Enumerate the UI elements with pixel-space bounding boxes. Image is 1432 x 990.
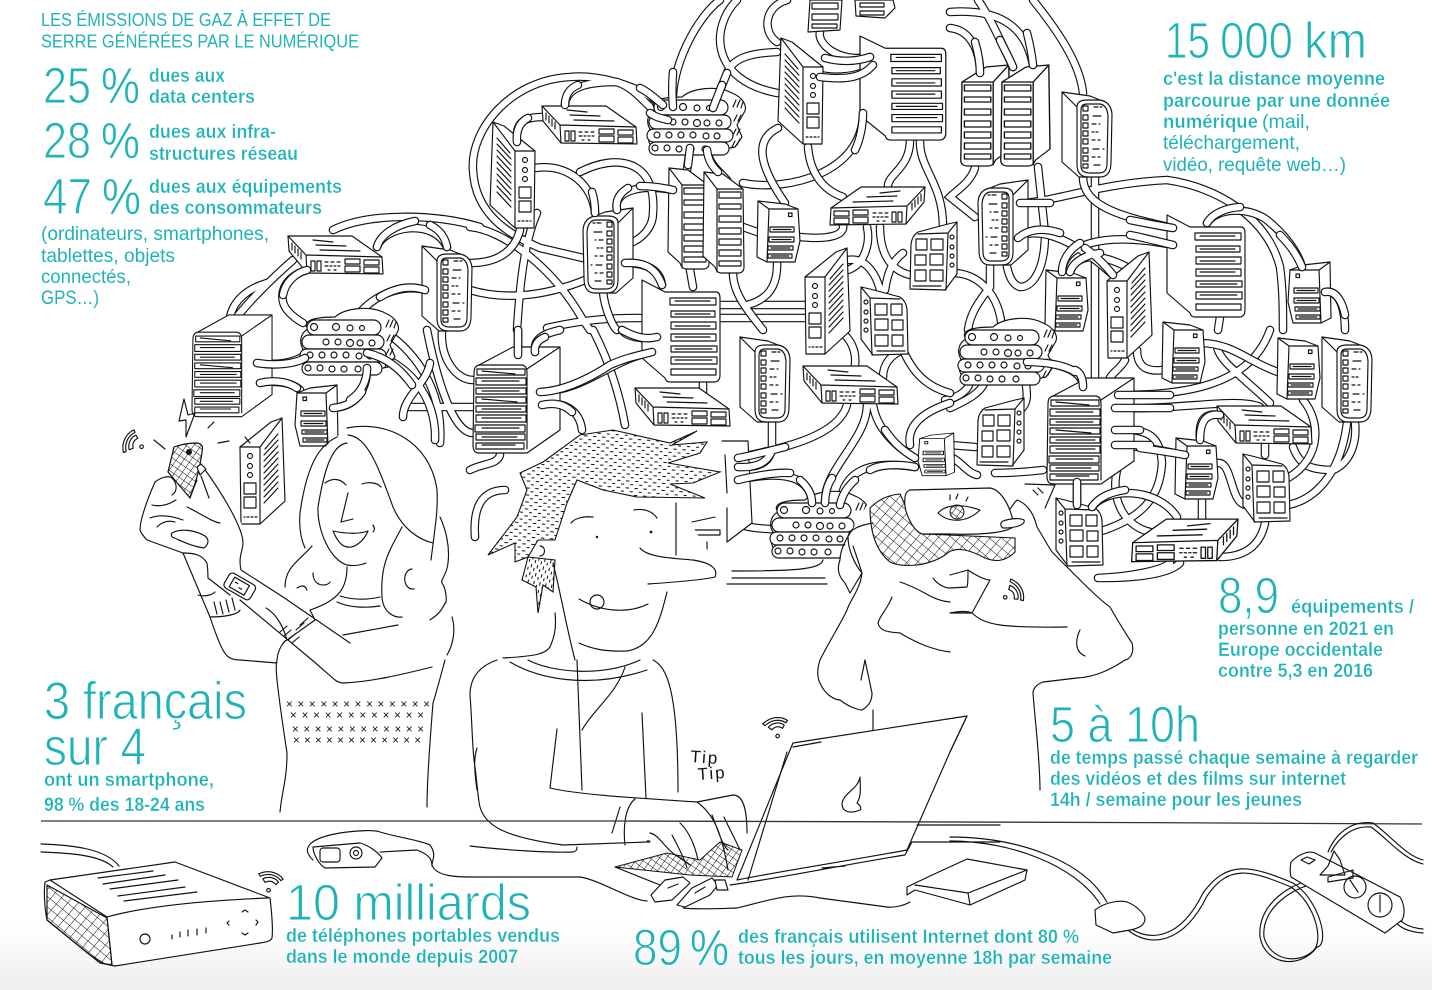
consumer devices note: [41, 223, 269, 309]
heading: SERRE GÉNÉRÉES PAR LE NUMÉRIQUE: [41, 32, 359, 52]
stat 28 %: structures réseau: [149, 143, 298, 165]
stat 47 %: 47: [43, 168, 92, 225]
icon: hard disk box: [907, 859, 1027, 905]
man hair: [488, 430, 720, 562]
man face and body lines: [470, 503, 747, 870]
stat 47 %: [43, 168, 342, 225]
stat 25 %: dues aux: [149, 65, 225, 87]
headline number: km: [1304, 12, 1367, 69]
thumb lines: [190, 476, 209, 498]
icon: smartphone: [168, 443, 202, 498]
tip tip sound text: Tip: [690, 747, 720, 768]
description: parcourue par une donnée: [1163, 90, 1390, 112]
headline number: 15: [1165, 12, 1210, 69]
disk stacks: [300, 88, 1056, 558]
panel boxes: [422, 92, 1372, 422]
headline number: 8,9: [1218, 567, 1279, 624]
laptop: [737, 716, 967, 880]
sparks: [154, 422, 250, 449]
cuff stripes: [214, 598, 308, 643]
top cropped box: [855, 0, 895, 18]
man sideburn: [522, 557, 555, 613]
icon: wifi near phone: [119, 428, 148, 459]
heading: LES ÉMISSIONS DE GAZ À EFFET DE: [41, 10, 331, 30]
server behind the man's head: [691, 441, 752, 542]
headline number: [633, 919, 729, 976]
description: [1050, 747, 1418, 811]
stat 47 %: dues aux équipements: [149, 176, 342, 198]
background fade: [0, 925, 1432, 990]
headline number: 000: [1220, 12, 1293, 69]
icon: thumb nail on phone: [197, 464, 206, 475]
camera dot: [186, 449, 192, 455]
woman line art: [140, 426, 454, 812]
stat 28 %: dues aux infra-: [149, 121, 276, 143]
description: contre 5,3 en 2016: [1218, 660, 1373, 682]
laptop group: [615, 716, 967, 885]
description: vidéo, requête web…): [1163, 154, 1346, 176]
woman with smartphone: [119, 399, 455, 812]
description: Europe occidentale: [1218, 639, 1383, 661]
sweater x pattern: × × × × × × × × × × × × ×: [286, 699, 430, 711]
stat block: 89 %: [633, 919, 1112, 976]
sweater x row: × × × × × × × × × × × ×: [290, 710, 424, 722]
VR eye: [938, 494, 980, 520]
description: c'est la distance moyenne: [1163, 68, 1385, 90]
headline number: 5 à 10h: [1050, 696, 1200, 753]
description: numérique: [1163, 111, 1258, 133]
tip tip sound text: Tip: [697, 763, 727, 784]
woman hair and body knockout: [140, 426, 455, 812]
laptop keyboard: [615, 842, 742, 877]
description: des vidéos et des films sur internet: [1050, 768, 1346, 790]
network cloud illustration: [192, 0, 1372, 584]
icon: small phone on desk: [313, 843, 382, 868]
stat 47 %: %: [102, 168, 141, 225]
VR person knockout: [820, 495, 1125, 790]
stat 25 %: 25: [43, 57, 91, 114]
headline number: [44, 672, 247, 777]
consumer devices note: connectés,: [41, 266, 131, 288]
desk line: [41, 821, 1422, 824]
description: [1163, 68, 1390, 176]
headline number: [1165, 12, 1367, 69]
description: ont un smartphone,: [44, 769, 214, 791]
top cropped rack: [808, 0, 842, 32]
stat block: 3 français sur 4: [44, 672, 247, 816]
description: [286, 925, 560, 968]
stat block: 8,9 devices: [1218, 567, 1415, 682]
headline number: %: [690, 919, 729, 976]
consumer devices note: (ordinateurs, smartphones,: [41, 223, 269, 245]
stat 47 %: des consommateurs: [149, 197, 322, 219]
VR strap hatch: [870, 494, 1015, 565]
icon: lightning bolt: [179, 399, 195, 437]
stat block: 15 000 km: [1163, 12, 1390, 176]
heading: [41, 10, 359, 52]
VR right hand fingers: [1001, 519, 1024, 528]
switches: [288, 106, 1312, 562]
description: des français utilisent Internet dont 80 %: [738, 926, 1079, 948]
server outline: [691, 441, 752, 553]
description: dans le monde depuis 2007: [286, 946, 518, 968]
man with laptop: [470, 430, 747, 877]
desk objects: [41, 823, 1423, 966]
description: tous les jours, en moyenne 18h par semaine: [738, 947, 1112, 969]
VR headset: [905, 488, 1013, 534]
icon: power adapter: [1095, 901, 1145, 933]
stat block: 5 à 10h: [1050, 696, 1418, 811]
big servers: [192, 36, 1245, 484]
stat 28 %: [43, 112, 298, 169]
stat 28 %: 28: [43, 112, 91, 169]
VR person lines: [818, 500, 1133, 790]
description: [738, 926, 1112, 969]
icon: internet box: [44, 862, 272, 966]
stat block: 10 milliards: [286, 874, 560, 968]
man eyes: [596, 531, 652, 538]
laptop base and logo: [615, 716, 967, 885]
cables: [227, 0, 1355, 578]
headline number: 89: [633, 919, 682, 976]
description: équipements /: [1291, 596, 1415, 618]
cable plugs over devices: [257, 33, 1345, 507]
hard disk edge: [915, 870, 1027, 905]
consumer devices note: GPS…): [41, 287, 99, 309]
icon: wifi near box: [255, 869, 284, 895]
headline number: 3 français: [44, 672, 247, 731]
icon: power strip: [1290, 851, 1404, 933]
stat 28 %: %: [101, 112, 140, 169]
stat 25 %: %: [101, 57, 140, 114]
stat 25 %: [43, 57, 255, 114]
icon: usb plugs: [651, 877, 728, 907]
description: [44, 769, 214, 816]
stat block: greenhouse gas emissions: [41, 10, 359, 309]
description: 14h / semaine pour les jeunes: [1050, 789, 1302, 811]
icon: wifi on chest: [997, 577, 1027, 609]
icon: wrist watch: [223, 572, 257, 601]
tall racks: [668, 65, 1050, 273]
grid boxes: [861, 222, 1290, 566]
description: [1218, 596, 1415, 682]
louvered routers: [240, 38, 1152, 524]
small boxes: [295, 201, 1331, 499]
description: (mail,: [1262, 111, 1310, 133]
headline number: 10 milliards: [286, 874, 531, 931]
description: 98 % des 18-24 ans: [44, 794, 205, 816]
desk cables: [41, 823, 1423, 962]
description: de téléphones portables vendus: [286, 925, 560, 947]
man face knockout: [515, 500, 720, 655]
description: personne en 2021 en: [1218, 618, 1394, 640]
loose desk lines: [727, 484, 1055, 584]
sweater x row: × × × × × × × × × × × ×: [292, 724, 424, 736]
headline number: sur 4: [44, 718, 146, 777]
consumer devices note: tablettes, objets: [41, 245, 175, 267]
description: téléchargement,: [1163, 132, 1300, 154]
person with VR headset: [818, 488, 1133, 790]
stat 25 %: data centers: [149, 86, 255, 108]
sweater x row: × × × × × × × × × × × ×: [293, 735, 421, 747]
man tongue: [590, 595, 604, 609]
icon: wifi near laptop: [762, 716, 790, 740]
network devices: [192, 0, 1372, 566]
